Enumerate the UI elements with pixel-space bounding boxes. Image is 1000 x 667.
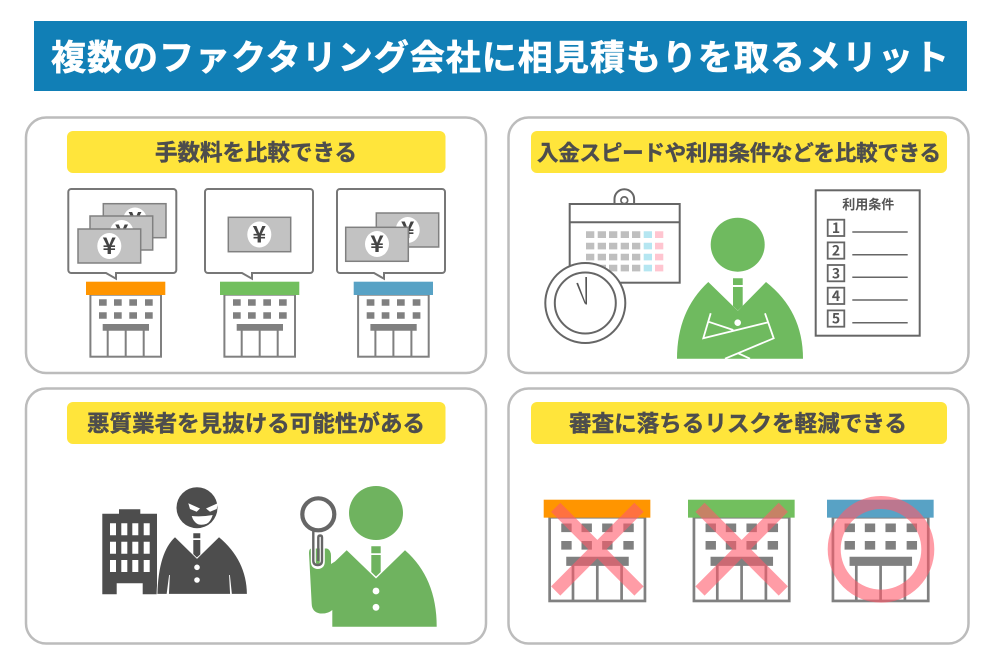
heading: compare fees [67,131,446,173]
heading: reduce rejection risk [531,402,947,444]
heading: compare fees: 手数料を比較できる [155,140,357,166]
building: green [688,500,795,601]
heading: spot bad operators: 悪質業者を見抜ける可能性がある [87,410,425,436]
heading: compare speed and terms: 入金スピードや利用条件などを比較できる [537,142,941,166]
speech bubble: two bills: ¥ [401,211,415,245]
speech bubble: one bill [205,189,313,279]
icon: magnifying glass [302,498,334,566]
building: orange [544,500,650,601]
heading: compare speed and terms [531,131,947,173]
speech bubble: two bills [337,189,445,279]
panel: spot bad operators [26,388,486,644]
list of terms 1 to 5: 4 [832,286,840,306]
red cross mark [556,507,639,591]
document: terms of use [816,190,920,336]
list of terms 1 to 5: 5 [832,309,840,329]
icon: villain in suit [157,487,247,594]
red circle mark [834,502,928,596]
speech bubble: three bills: ¥ [115,214,129,248]
list of terms 1 to 5 [828,218,908,329]
list of terms 1 to 5: 3 [832,263,840,283]
building: blue [354,282,433,357]
icon: calendar [570,189,680,283]
panel: reduce rejection risk [508,388,968,644]
list of terms 1 to 5: 1 [832,218,840,238]
heading: spot bad operators [67,402,446,444]
icon: clock [545,263,625,343]
speech bubble: three bills: ¥ [103,227,117,261]
red cross mark [700,507,783,591]
speech bubble: three bills [68,189,176,279]
building: green [220,282,299,357]
speech bubble: three bills: ¥ [128,202,142,236]
speech bubble: two bills: ¥ [370,225,384,259]
icon: green person with magnifying glass [302,486,437,627]
heading: reduce rejection risk: 審査に落ちるリスクを軽減できる [569,412,907,436]
speech bubble: one bill: ¥ [253,216,267,250]
panel: compare fees [26,118,486,373]
title banner: 複数のファクタリング会社に相見積もりを取るメリット [51,39,949,78]
document: terms of use: 利用条件 [842,197,894,212]
title banner [34,21,967,91]
icon: green person with crossed arms [677,218,803,359]
building: blue [827,500,934,601]
icon: dark office building [102,509,157,594]
building: orange [86,282,165,357]
panel: compare speed and terms [508,118,968,373]
list of terms 1 to 5: 2 [832,241,840,261]
